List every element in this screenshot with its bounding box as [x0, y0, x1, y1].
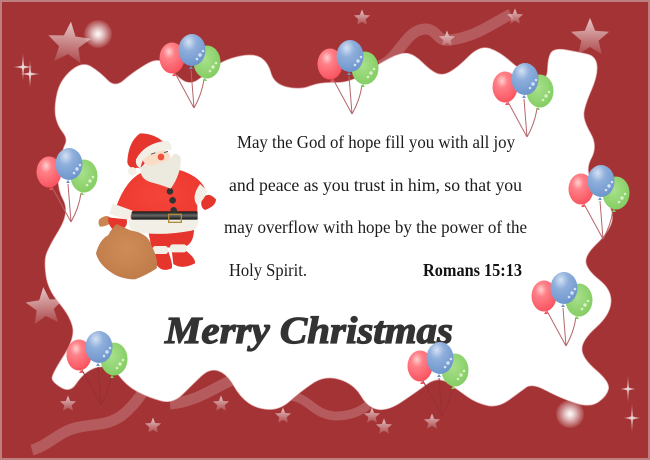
balloon cluster: top right — [492, 63, 554, 137]
Santa coat — [116, 169, 205, 228]
Bible verse text: Romans 15:13 — [423, 260, 522, 280]
Santa mitten: right — [201, 195, 216, 210]
balloon cluster: right — [568, 165, 630, 239]
Bible verse text: Holy Spirit. — [229, 260, 307, 280]
coat buttons — [167, 188, 177, 214]
white wavy message panel — [45, 48, 613, 410]
Santa eyes — [151, 151, 168, 154]
Santa hat — [127, 133, 165, 170]
glowing orb: bottom right — [556, 400, 584, 428]
hat pompom — [128, 167, 137, 176]
Santa coat hem — [129, 217, 198, 234]
balloon cluster: top left — [160, 34, 220, 108]
Santa mitten: left — [108, 217, 127, 229]
ribbon: top right — [380, 14, 511, 66]
ribbon: bottom left — [32, 392, 143, 450]
glowing orb: top left — [84, 20, 112, 48]
Bible verse text — [224, 132, 527, 280]
greeting heading: Merry Christmas — [164, 310, 453, 352]
balloon cluster: bottom centre — [408, 342, 468, 416]
Santa beard — [141, 154, 181, 189]
ribbon: bottom right — [290, 396, 368, 416]
belt buckle — [169, 214, 181, 222]
Bible verse text: and peace as you trust in him, so that you — [229, 175, 522, 195]
balloon cluster: top centre — [318, 40, 378, 114]
Bible verse text: May the God of hope fill you with all joy — [237, 132, 515, 152]
Santa sleeve cuff: left — [109, 203, 133, 220]
Santa face — [143, 148, 171, 168]
Santa trousers and cuffs — [148, 228, 194, 254]
Santa sack knot — [98, 216, 111, 227]
ribbon: bottom centre — [170, 380, 232, 404]
Santa cuff: right — [195, 184, 208, 205]
balloon cluster: lower right — [532, 272, 592, 346]
balloon cluster: left — [36, 148, 98, 222]
Santa boots — [153, 250, 195, 270]
sparkles — [13, 53, 640, 433]
hat brim — [136, 141, 172, 168]
balloon cluster: bottom left — [66, 331, 128, 405]
Santa sack — [96, 224, 157, 279]
Santa belt — [132, 211, 198, 220]
Bible verse text: may overflow with hope by the power of the — [224, 217, 527, 237]
illustration: Santa Claus with sack — [96, 133, 216, 279]
Santa nose — [158, 154, 164, 160]
